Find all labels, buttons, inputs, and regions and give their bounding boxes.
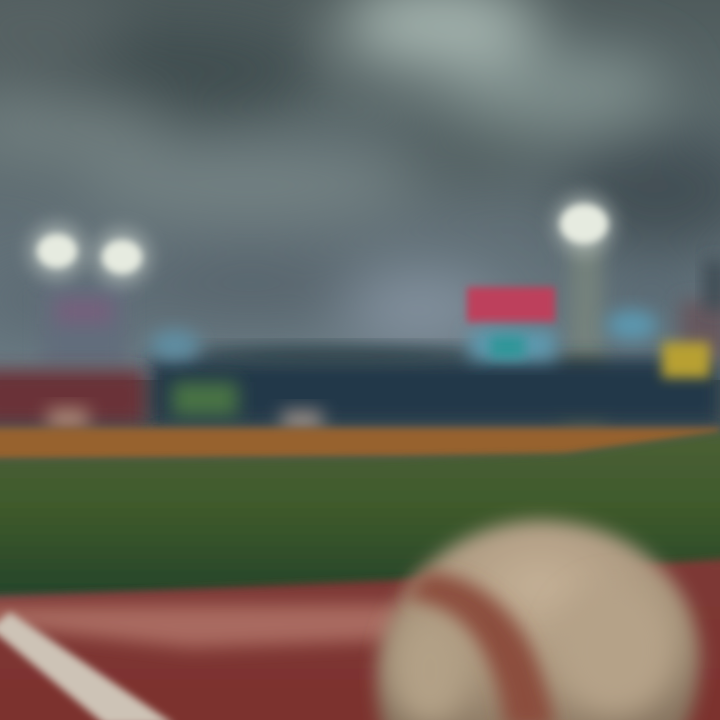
white foul line xyxy=(0,612,175,720)
storm clouds xyxy=(0,0,720,345)
sky background xyxy=(0,0,720,380)
baseball xyxy=(378,520,700,720)
left light tower xyxy=(29,223,150,365)
floodlights: left pair xyxy=(29,223,150,285)
right light tower xyxy=(554,194,614,420)
infield dirt strip xyxy=(0,428,720,460)
floodlight: right xyxy=(554,194,614,254)
grass field xyxy=(0,430,720,598)
outfield wall and stands xyxy=(0,260,720,432)
track pale stripe xyxy=(0,604,400,648)
scoreboard: pink and teal xyxy=(467,287,555,360)
red track foreground xyxy=(0,558,720,720)
